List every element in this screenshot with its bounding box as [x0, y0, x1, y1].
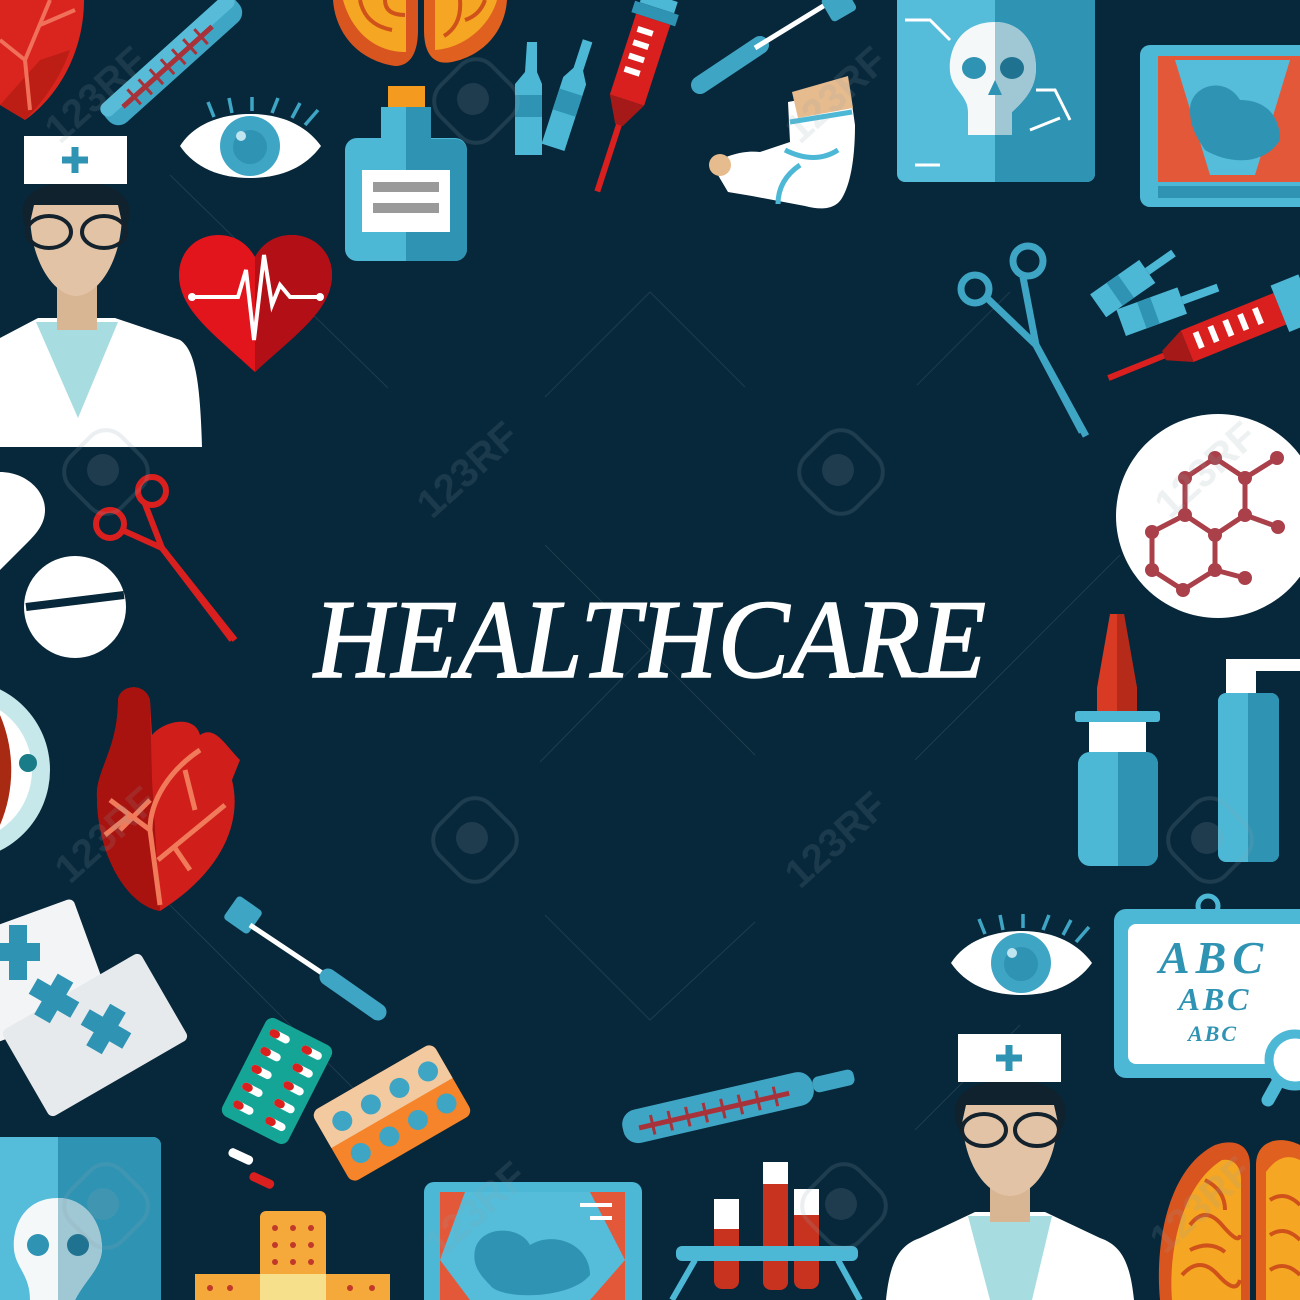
icon: blue forceps — [961, 246, 1086, 436]
icon: teal blister pack — [219, 1015, 335, 1147]
icon: brain top — [333, 0, 507, 66]
watermarks: 123RF — [37, 39, 155, 152]
icon: thermometer bottom — [619, 1060, 858, 1146]
watermarks: 123RF — [777, 39, 895, 152]
icon: adhesive plaster bottom — [195, 1211, 390, 1300]
icon: ampoules top — [515, 37, 599, 155]
icon: pills left — [0, 472, 126, 658]
watermarks: 123RF — [417, 1154, 535, 1267]
icon: molecule circle — [1116, 414, 1300, 618]
icon: ampoules right — [1090, 242, 1223, 336]
icon: doctor top left — [0, 136, 202, 447]
icon: reflex hammer top — [700, 0, 857, 85]
icon: eye bottom — [951, 914, 1092, 995]
icon: doctor bottom — [886, 1034, 1134, 1300]
icon: reflex hammer bottom — [223, 895, 378, 1012]
icon: ultrasound top right — [1140, 45, 1300, 207]
icon: skull x-ray bottom — [0, 1137, 161, 1300]
icon: brain bottom right — [1159, 1140, 1300, 1300]
icon: orange blister pack — [311, 1042, 473, 1184]
icon: bandaged foot — [709, 76, 855, 208]
icon: heart with pulse — [179, 235, 332, 372]
icon: plasters left — [0, 898, 189, 1118]
icon: syringe right — [1099, 274, 1300, 401]
icon: loose capsules — [227, 1147, 275, 1190]
title: HEALTHCARE — [312, 578, 986, 702]
watermarks: 123RF — [1147, 414, 1265, 527]
icon: thermometer top — [97, 0, 248, 131]
panel: eye chart: ABC — [1186, 1021, 1238, 1046]
icon: throat spray — [1218, 659, 1300, 862]
icon: test tubes — [672, 1162, 860, 1300]
panel: eye chart — [1114, 896, 1300, 1100]
icon: eye top — [180, 97, 321, 178]
icon: ultrasound bottom — [424, 1182, 642, 1300]
watermarks: 123RF — [1142, 1149, 1260, 1262]
watermarks: 123RF — [777, 784, 895, 897]
watermarks: 123RF — [47, 779, 165, 892]
icon: heart top left — [0, 0, 84, 120]
icon: petri dish left — [0, 680, 50, 860]
icon: syringe top — [575, 0, 683, 199]
watermarks: 123RF — [409, 414, 527, 527]
icon: nasal spray — [1075, 614, 1160, 866]
icon: anatomical heart — [97, 687, 240, 911]
panel: eye chart: ABC — [1176, 981, 1252, 1017]
icon: skull x-ray top — [897, 0, 1095, 182]
icon: medicine bottle — [345, 86, 467, 261]
icon: red forceps — [96, 477, 235, 640]
eye chart letters: ABC — [1156, 932, 1269, 983]
